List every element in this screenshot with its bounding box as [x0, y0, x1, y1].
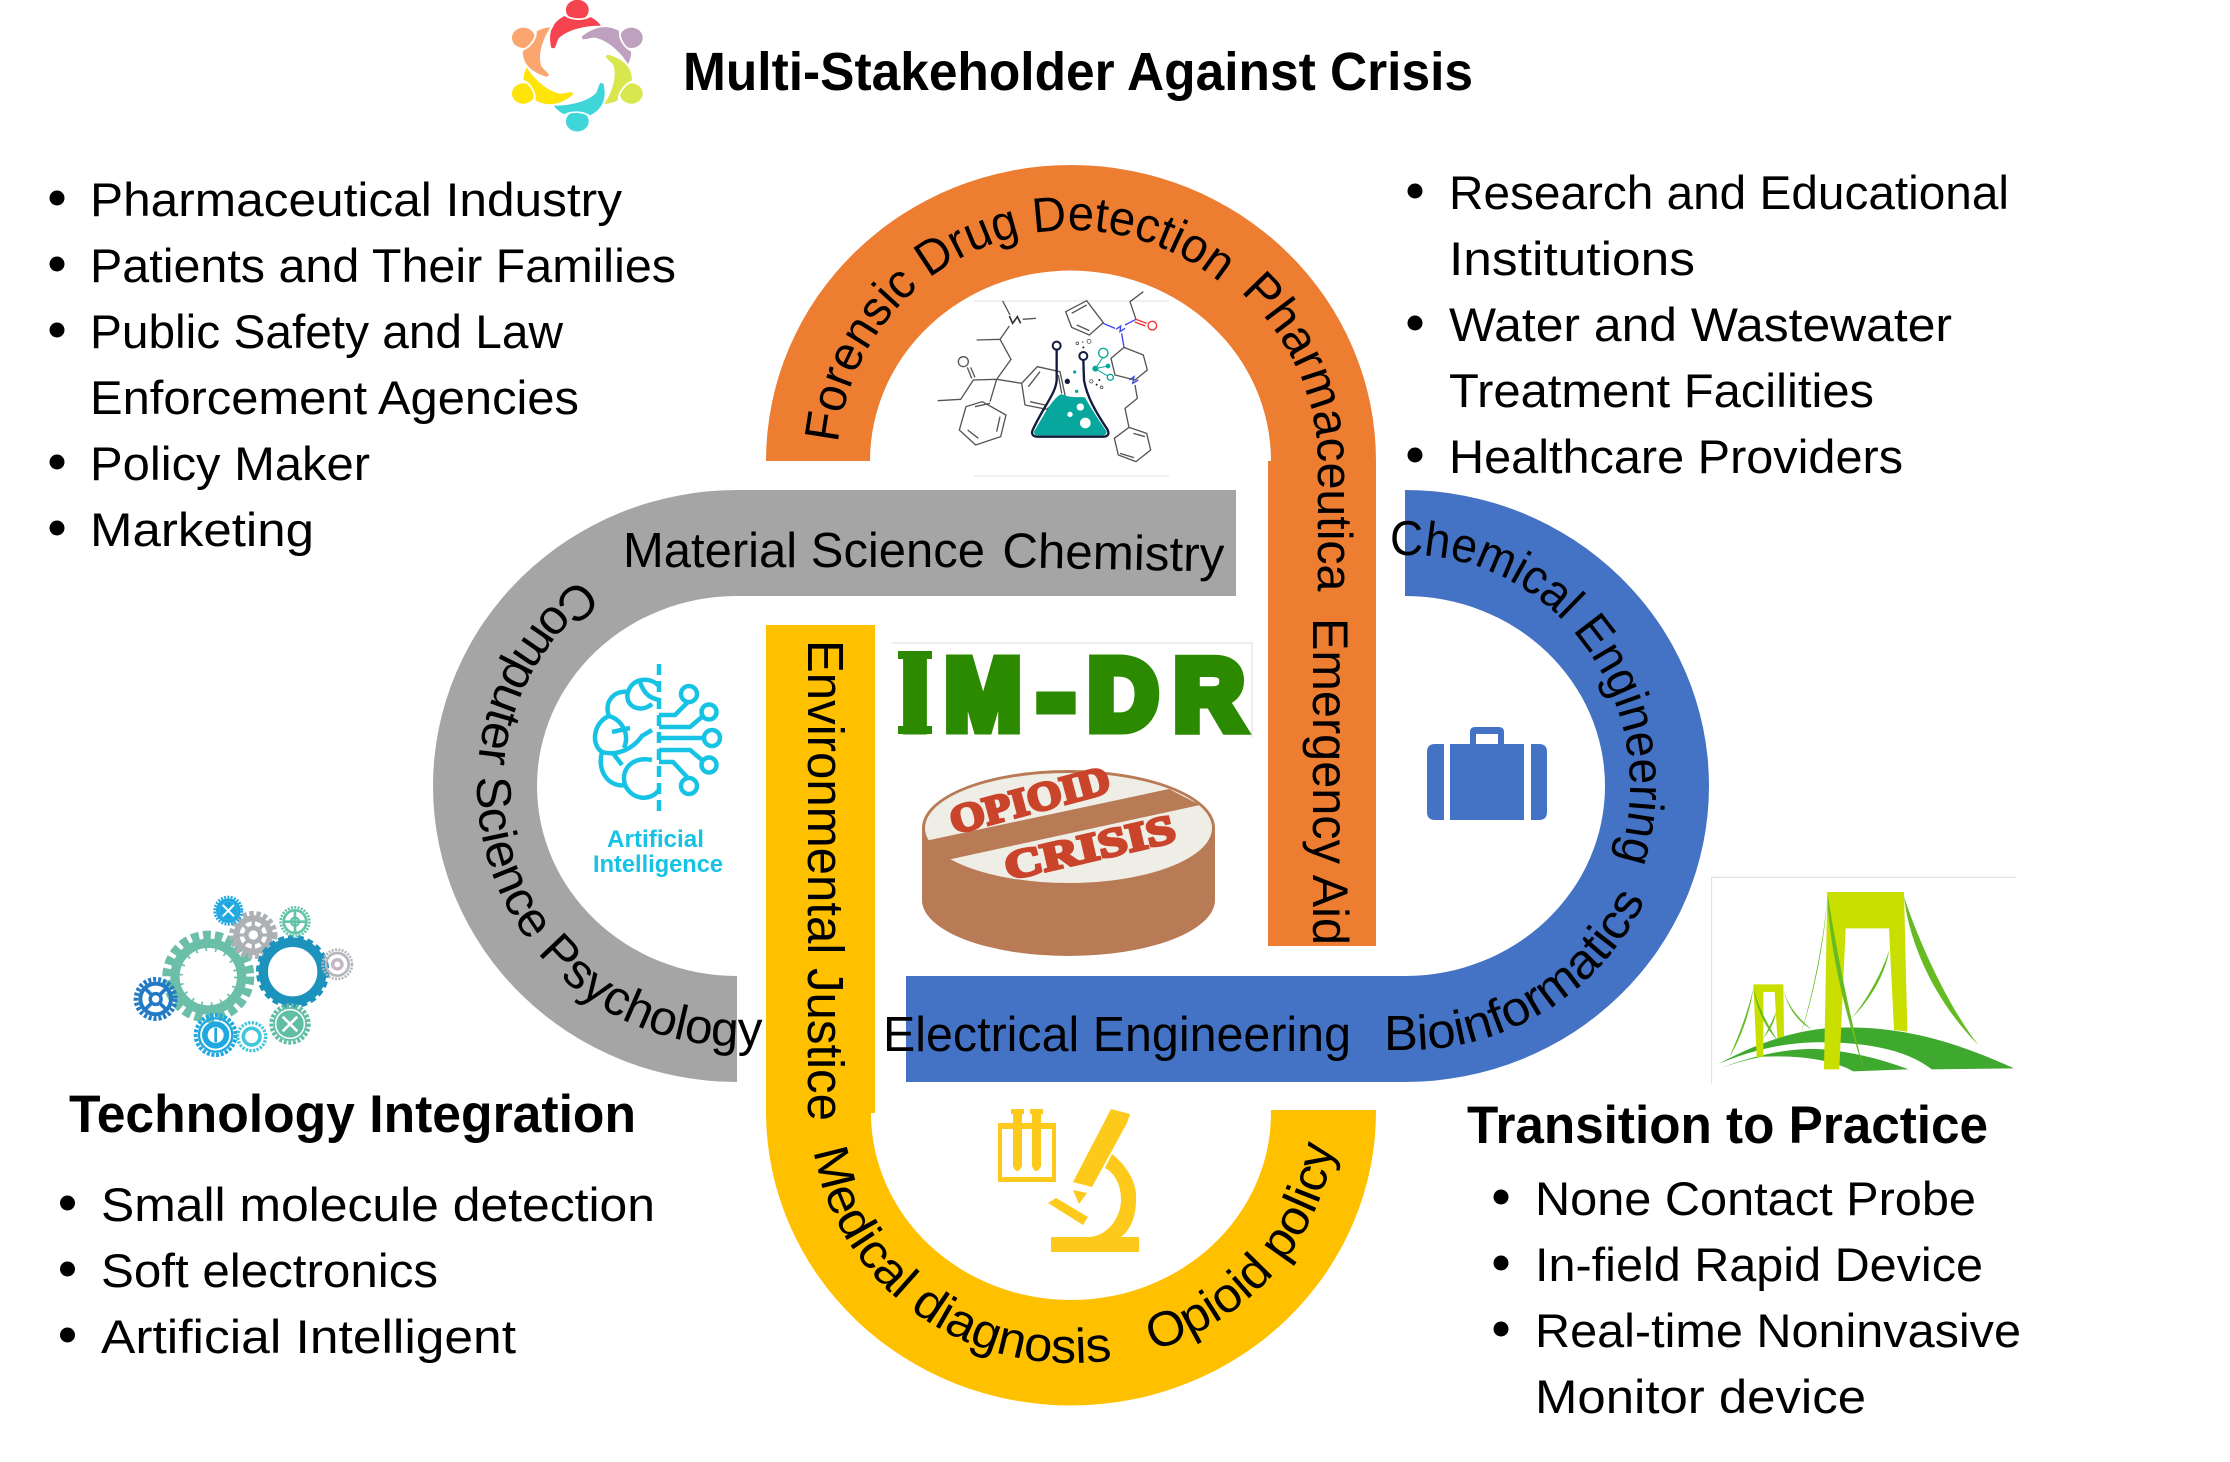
label: Forensic Drug Detection: Forensic Drug Detection [804, 198, 1230, 440]
label: Medical diagnosis: Medical diagnosis [814, 1146, 1110, 1364]
band: blue arch [906, 490, 1709, 1082]
icon: gears [136, 897, 352, 1055]
icon: opioid crisis pill: CRISIS [1000, 806, 1180, 889]
icon: AI brain [595, 664, 720, 815]
label: Emergency Aid: Emergency Aid [1302, 618, 1358, 945]
gear: small blue x [215, 897, 242, 924]
label: Material Science: Material Science [623, 524, 985, 578]
panel: transition list: Monitor device [1535, 1370, 1866, 1423]
band: yellow arch [766, 625, 1376, 1406]
heading: Transition to Practice: Transition to Practice [1467, 1096, 1988, 1155]
logo: IM-DR [892, 639, 1252, 751]
panel: stakeholder list right: Healthcare Providers [1449, 430, 1903, 483]
icon: molecule and flask [938, 292, 1169, 476]
caption: Artificial Intelligence: Intelligence [593, 851, 723, 878]
label: Chemistry: Chemistry [1002, 524, 1225, 583]
label: Electrical Engineering: Electrical Engineering [883, 1008, 1351, 1062]
label: Pharmaceutica: Pharmaceutica [1243, 270, 1354, 592]
icon: test tubes and microscope [998, 1109, 1139, 1252]
logo: IM-DR: - [1038, 639, 1074, 751]
icon: opioid crisis pill [922, 757, 1215, 956]
gear: teal x [271, 1005, 309, 1043]
panel: stakeholder list left: Patients and Their Families [90, 239, 676, 292]
logo: IM-DR: I [902, 639, 928, 751]
label: Chemical Engineering: Chemical Engineering [1392, 520, 1665, 864]
gear: dark blue [136, 979, 175, 1019]
panel: technology list: Artificial Intelligent [101, 1310, 516, 1363]
panel: technology list: Small molecule detection [101, 1178, 655, 1231]
gear: gray [232, 913, 275, 957]
icon: team of six people [499, 0, 656, 132]
label: Computer Science Psychology: Computer Science Psychology [476, 586, 762, 1056]
panel: stakeholder list left: Enforcement Agencies [90, 371, 579, 424]
gear: blue ring [258, 937, 327, 1006]
gear: small gray right [323, 950, 352, 979]
title: Multi-Stakeholder Against Crisis [683, 42, 1473, 102]
panel: stakeholder list right [1408, 166, 2009, 483]
heading: Technology Integration: Technology Integration [69, 1085, 636, 1144]
panel: transition list: In-field Rapid Device [1535, 1238, 1983, 1291]
panel: stakeholder list left [50, 173, 676, 556]
gear: light cyan [238, 1023, 266, 1051]
panel: stakeholder list left: Public Safety and Law [90, 305, 564, 358]
panel: transition list: None Contact Probe [1535, 1172, 1976, 1225]
panel: stakeholder list left: Policy Maker [90, 437, 370, 490]
icon: briefcase [1427, 727, 1547, 820]
panel: stakeholder list right: Water and Wastewater [1449, 298, 1952, 351]
caption: Artificial Intelligence [593, 826, 723, 878]
panel: stakeholder list left: Pharmaceutical Industry [90, 173, 623, 226]
gear: large green [168, 936, 249, 1017]
logo: IM-DR: R [1174, 639, 1244, 751]
label: Environmental Justice: Environmental Justice [797, 640, 854, 1121]
panel: technology list [60, 1178, 655, 1363]
band: gray arch [433, 490, 1236, 1082]
caption: Artificial Intelligence: Artificial [607, 826, 704, 853]
icon: opioid crisis pill: OPIOID [945, 757, 1115, 843]
icon: bridge [1712, 877, 2016, 1083]
panel: stakeholder list right: Institutions [1449, 232, 1695, 285]
gear: mid blue [196, 1015, 236, 1055]
logo: IM-DR: D [1088, 639, 1158, 751]
panel: stakeholder list left: Marketing [90, 503, 314, 556]
panel: transition list: Real-time Noninvasive [1535, 1304, 2021, 1357]
band: orange arch [766, 165, 1376, 946]
panel: technology list: Soft electronics [101, 1244, 438, 1297]
panel: transition list [1494, 1172, 2021, 1423]
gear: small teal [281, 907, 309, 936]
label: Bioinformatics: Bioinformatics [1388, 892, 1642, 1050]
logo: IM-DR: M [945, 639, 1021, 751]
panel: stakeholder list right: Treatment Facilities [1449, 364, 1874, 417]
panel: stakeholder list right: Research and Educational [1449, 166, 2009, 219]
label: Opioid policy: Opioid policy [1148, 1141, 1340, 1346]
